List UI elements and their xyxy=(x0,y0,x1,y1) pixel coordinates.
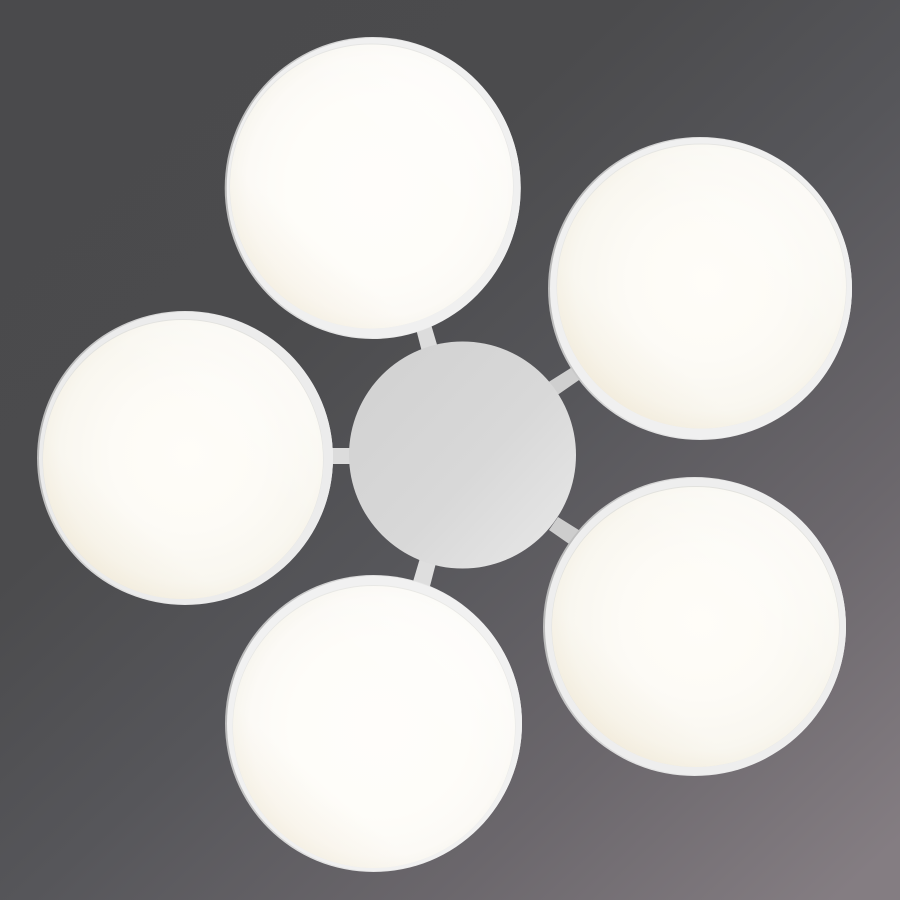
lamp disc: left xyxy=(37,311,333,605)
lamp disc: lower right xyxy=(543,477,846,776)
lamp disc: right xyxy=(548,137,852,440)
lamp disc: top xyxy=(225,37,521,339)
lamp disc: lower left xyxy=(225,575,522,872)
connecting arms xyxy=(328,321,582,590)
central hub xyxy=(349,342,576,568)
